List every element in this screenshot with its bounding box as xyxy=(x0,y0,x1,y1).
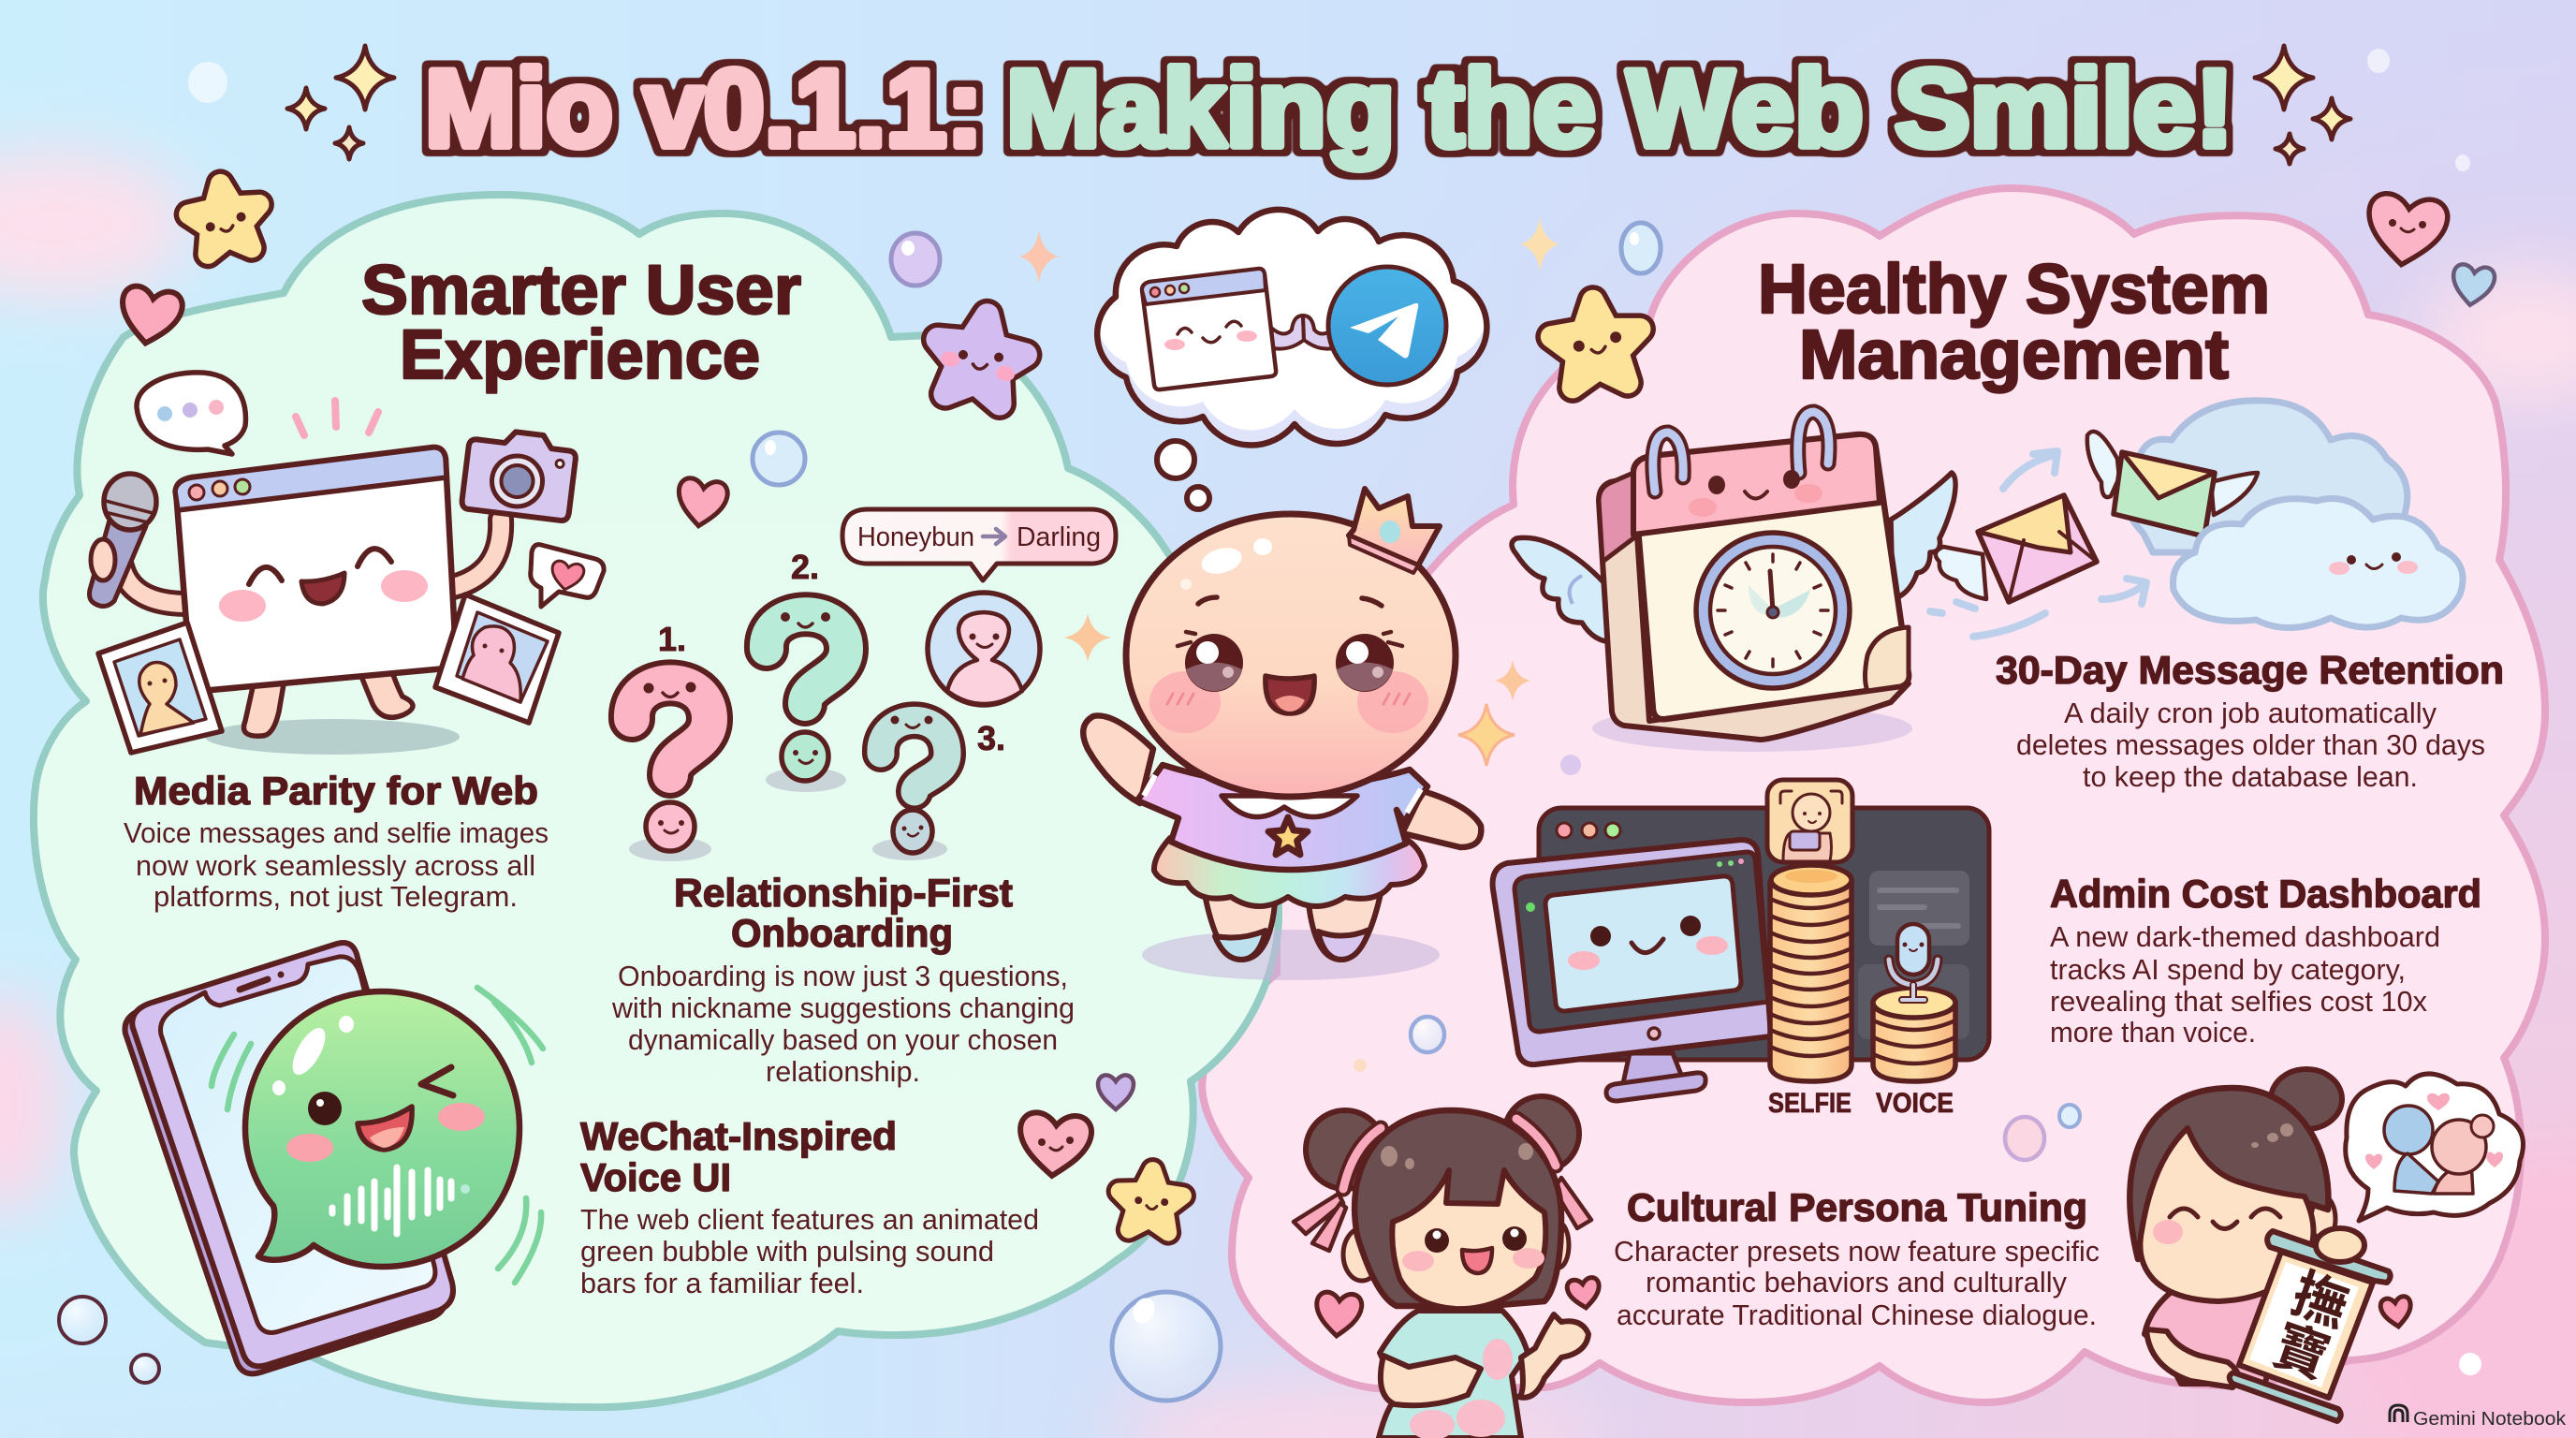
heart xyxy=(2379,1296,2413,1328)
head xyxy=(1126,514,1456,797)
panel: smarter user experience cloud xyxy=(34,195,1279,1407)
calendar face xyxy=(1689,470,1822,517)
character: girl in pink qipao with scroll xyxy=(2130,1069,2524,1421)
number 3: 3. xyxy=(977,719,1005,757)
left arm xyxy=(1381,1356,1481,1405)
selfie coin stack xyxy=(1770,865,1852,1081)
text: wechat-inspired voice ui: bars for a familiar feel. xyxy=(580,1267,864,1299)
panel: healthy system management cloud xyxy=(1202,188,2545,1402)
text: admin cost dashboard: tracks AI spend by category, xyxy=(2050,953,2406,986)
background light dots xyxy=(188,49,2470,171)
front cloud with face xyxy=(2173,498,2463,628)
text: media parity for web: now work seamlessly across all xyxy=(136,849,535,882)
text: admin cost dashboard: A new dark-themed dashboard xyxy=(2050,920,2440,953)
decorations: lower left xyxy=(59,1075,1221,1401)
icon: heart speech bubble xyxy=(531,545,604,607)
text: wechat-inspired voice ui: WeChat-Inspired xyxy=(580,1114,897,1158)
text: admin cost dashboard: revealing that selfies cost 10x xyxy=(2050,985,2427,1018)
icon: pink heart xyxy=(116,284,184,348)
star badge xyxy=(1268,817,1308,855)
text: cultural persona tuning: Cultural Persona Tuning xyxy=(1627,1185,2087,1229)
hair shine xyxy=(1381,1143,1533,1169)
thought bubble xyxy=(2346,1074,2524,1221)
pink envelope xyxy=(1936,495,2097,602)
question mark 1 xyxy=(629,682,711,861)
eyes xyxy=(1178,632,1402,692)
right arm xyxy=(1402,791,1481,847)
skirt xyxy=(1154,838,1425,906)
green envelope xyxy=(2087,432,2258,536)
heading: healthy system management: Healthy System xyxy=(1758,250,2270,328)
icon: blue bubble xyxy=(753,433,805,485)
question mark 2 xyxy=(766,612,846,792)
thought cloud: web and telegram xyxy=(1097,195,1486,445)
number 2: 2. xyxy=(791,548,819,586)
watermark: Gemini Notebook xyxy=(2390,1405,2567,1430)
scroll: 寶 xyxy=(2265,1314,2336,1390)
character: girl in mint qipao xyxy=(1294,1096,1602,1438)
icon: peach sparkle xyxy=(1019,230,1059,283)
text: wechat-inspired voice ui: The web client features an animated xyxy=(580,1203,1039,1236)
text: admin cost dashboard: more than voice. xyxy=(2050,1016,2256,1049)
rings xyxy=(1653,412,1829,492)
watermark: Gemini Notebook: Gemini Notebook xyxy=(2413,1409,2567,1430)
front sheet xyxy=(1633,434,1909,719)
dress xyxy=(1379,1311,1528,1438)
legs xyxy=(243,669,413,736)
text: relationship-first onboarding: Onboarding is now just 3 questions, xyxy=(618,960,1068,992)
dark dashboard panel xyxy=(1539,808,1989,1060)
text: admin cost dashboard: Admin Cost Dashboard xyxy=(2050,872,2481,916)
icon: yellow star top left xyxy=(185,179,265,256)
phone back layer xyxy=(125,950,446,1373)
text: wechat-inspired voice ui: green bubble with pulsing sound xyxy=(580,1235,994,1268)
nickname speech pill: Honeybun xyxy=(857,522,974,552)
illustration: phone with green voice bubble xyxy=(125,943,543,1373)
number 1: 1. xyxy=(658,620,686,658)
heading: smarter user experience: Experience xyxy=(400,315,760,393)
clock xyxy=(1696,533,1850,688)
green bubble xyxy=(245,991,520,1267)
text: wechat-inspired voice ui xyxy=(580,1114,1039,1299)
legs xyxy=(1204,889,1382,960)
arm xyxy=(2146,1329,2238,1387)
nickname speech pill: Darling xyxy=(1017,522,1101,552)
pages xyxy=(1599,477,1909,740)
selfie card xyxy=(1767,780,1852,862)
face xyxy=(219,549,428,622)
left arm and microphone xyxy=(90,474,187,607)
text: wechat-inspired voice ui: Voice UI xyxy=(580,1155,731,1199)
illustration: admin cost dashboard xyxy=(1493,780,1989,1119)
text: cultural persona tuning: accurate Traditional Chinese dialogue. xyxy=(1617,1299,2097,1331)
curled corner xyxy=(1865,627,1909,691)
text: media parity for web: Media Parity for Web xyxy=(134,769,538,813)
icon: small heart xyxy=(674,477,729,529)
voice coin stack xyxy=(1873,988,1955,1081)
right arm xyxy=(449,520,501,588)
icon: blue bubble right xyxy=(1621,223,1661,273)
icon: purple star xyxy=(929,308,1031,406)
face xyxy=(1392,1170,1545,1309)
nickname speech pill xyxy=(842,509,1116,580)
heading: healthy system management: Management xyxy=(1799,315,2229,393)
text: cultural persona tuning: romantic behaviors and culturally xyxy=(1646,1266,2067,1299)
text: cultural persona tuning xyxy=(1614,1185,2100,1331)
right arm xyxy=(1518,1314,1588,1398)
hair ribbon bands xyxy=(1343,1119,1556,1189)
icon: polaroid left xyxy=(98,623,222,753)
icon: telegram xyxy=(1328,267,1446,385)
sound bars xyxy=(332,1167,451,1234)
icon: polaroid right xyxy=(435,594,559,723)
phone screen xyxy=(160,957,435,1333)
hands xyxy=(1271,315,1335,349)
mascot: Mio character xyxy=(1083,489,1481,980)
icon: blue heart xyxy=(2450,263,2496,308)
text: 30-day message retention xyxy=(1996,648,2504,793)
small window xyxy=(1142,269,1276,389)
text: relationship-first onboarding: with nickname suggestions changing xyxy=(611,991,1075,1024)
avatar xyxy=(928,593,1040,705)
crown xyxy=(1349,489,1440,573)
title sparkles left xyxy=(287,46,394,159)
text: relationship-first onboarding xyxy=(611,871,1075,1088)
illustration: calendar with clock and winged messages xyxy=(1512,401,2463,752)
thought dots xyxy=(1157,441,1209,509)
label: voice: VOICE xyxy=(1876,1088,1954,1119)
excitement lines xyxy=(296,401,378,435)
heading: smarter user experience xyxy=(361,251,801,393)
heading: healthy system management xyxy=(1758,250,2270,393)
shadow xyxy=(205,719,460,755)
sparkles near mascot xyxy=(1064,217,1581,775)
hair xyxy=(1354,1110,1561,1306)
question mark 3 xyxy=(872,715,947,860)
icon: yellow star right xyxy=(1548,297,1645,389)
buns xyxy=(1306,1110,1384,1189)
scroll: 撫 xyxy=(2284,1263,2355,1339)
icon: chat bubble with dots xyxy=(137,373,245,454)
phone body xyxy=(132,943,453,1366)
text: media parity for web: Voice messages and selfie images xyxy=(124,816,549,849)
text: relationship-first onboarding: Onboarding xyxy=(731,911,953,955)
ear xyxy=(2311,1196,2335,1241)
title sparkles right xyxy=(2255,46,2350,164)
illustration: onboarding questions xyxy=(629,509,1116,861)
title: Mio v0.1.1: xyxy=(425,47,983,169)
text: relationship-first onboarding: Relationship-First xyxy=(674,871,1013,915)
shirt xyxy=(1137,765,1427,870)
heading: smarter user experience: Smarter User xyxy=(361,251,801,329)
face xyxy=(2140,1128,2314,1301)
illustration: web window mascot xyxy=(90,373,604,755)
left arm xyxy=(1083,715,1153,803)
icon: smiling heart xyxy=(2363,191,2450,270)
text: admin cost dashboard xyxy=(2050,872,2481,1049)
icon: camera xyxy=(461,427,578,521)
text: relationship-first onboarding: dynamically based on your chosen xyxy=(628,1023,1058,1056)
motion arcs xyxy=(212,988,543,1283)
text: media parity for web xyxy=(124,769,549,913)
hearts xyxy=(1314,1291,1363,1338)
bun xyxy=(2271,1069,2342,1129)
window body xyxy=(176,448,456,691)
scroll xyxy=(2230,1228,2391,1421)
hair shine xyxy=(2251,1123,2293,1148)
label: selfie: SELFIE xyxy=(1768,1088,1852,1119)
back cloud xyxy=(2125,401,2408,552)
title: Making the Web Smile! xyxy=(1006,47,2233,169)
text: 30-day message retention: A daily cron job automatically xyxy=(2064,697,2437,729)
text: cultural persona tuning: Character presets now feature specific xyxy=(1614,1235,2100,1268)
microphone xyxy=(1889,924,1938,1000)
title xyxy=(425,47,2233,169)
text: 30-day message retention: deletes messages older than 30 days xyxy=(2016,728,2485,761)
text: 30-day message retention: to keep the database lean. xyxy=(2083,760,2418,793)
dress xyxy=(2144,1279,2284,1384)
text: 30-day message retention: 30-Day Message Retention xyxy=(1996,648,2504,692)
decorations: right panel bubbles xyxy=(1354,1017,2481,1375)
monitor xyxy=(1493,840,1771,1101)
icon: lavender bubble xyxy=(891,233,940,286)
collar xyxy=(1222,796,1357,817)
ribbons xyxy=(1294,1178,1591,1251)
text: relationship-first onboarding: relationship. xyxy=(766,1055,920,1088)
text: media parity for web: platforms, not just Telegram. xyxy=(154,880,518,913)
hair back xyxy=(2130,1088,2328,1259)
ears xyxy=(1343,1228,1381,1281)
arrows xyxy=(1930,451,2146,637)
wings xyxy=(1512,473,1955,642)
